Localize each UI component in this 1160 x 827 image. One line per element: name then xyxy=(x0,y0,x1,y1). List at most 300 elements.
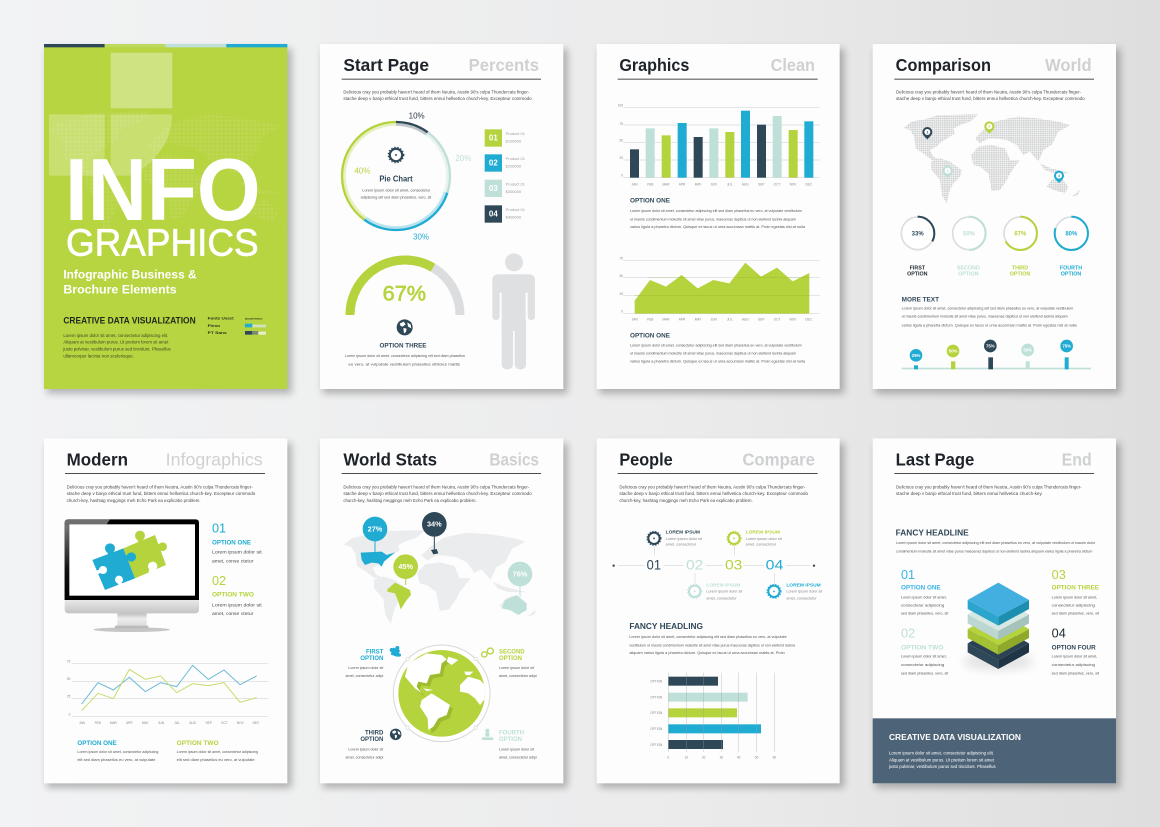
horizontal bar chart: 40 xyxy=(737,755,741,759)
bar chart: SEP xyxy=(758,183,764,187)
pie chart text: adipiscing elit sed diam phasellus, vero, sit xyxy=(361,196,431,200)
option 02 text: Lorem ipsum dolor sit xyxy=(212,602,263,607)
horizontal bar chart: OPTION xyxy=(650,679,663,683)
fancy text: vestibulum ut mauris condimentum molestie sit amet vitae purus maecenas dapibus ut non eleifend lacinia xyxy=(629,643,796,647)
timeline: 01 xyxy=(647,557,661,573)
intro text: Delicious cray you probably haven't heard of them Neutra, Austin 90's culpa Thundercats finger- xyxy=(343,89,530,94)
fancy headline: FANCY HEADLINE xyxy=(896,529,969,538)
option 03: 03 xyxy=(1052,568,1066,582)
legend xyxy=(485,129,526,223)
panel: world stats xyxy=(320,438,568,788)
donut labels xyxy=(907,265,1082,277)
stat bubbles: 34% xyxy=(427,520,442,529)
line chart: JUN xyxy=(158,721,165,725)
intro text: Delicious cray you probably haven't heard of them Neutra, Austin 90's culpa Thundercats finger- xyxy=(67,484,253,489)
highlighted countries xyxy=(361,549,527,615)
horizontal bar chart: OPTION xyxy=(650,711,663,715)
subheading: End xyxy=(1062,450,1092,470)
intro text: Delicious cray you probably haven't heard of them Neutra, Austin 90's culpa Thundercats finger- xyxy=(619,484,806,489)
option 04: 04 xyxy=(1052,627,1066,641)
page shadow xyxy=(875,49,1120,394)
second option: amet, consectetur adipi xyxy=(499,674,537,678)
line chart: MAR xyxy=(110,721,118,725)
fourth option: FOURTH xyxy=(499,730,524,736)
option 03: consectetur adipiscing xyxy=(1052,604,1095,608)
first option: Lorem ipsum dolor sit xyxy=(348,666,383,670)
heading: People xyxy=(619,450,673,470)
map pins xyxy=(922,121,1064,183)
dotted world map xyxy=(903,114,1080,203)
timeline: 03 xyxy=(725,557,743,573)
second option xyxy=(499,649,537,678)
step text: amet, consectetur xyxy=(786,596,817,600)
icon: puzzle pieces xyxy=(92,531,167,590)
subheading: Infographics xyxy=(166,450,263,470)
icon: gears xyxy=(482,648,493,657)
page shadow xyxy=(599,49,844,394)
subheading: Basics xyxy=(489,450,539,470)
legend option two: OPTION TWO xyxy=(177,741,219,747)
area chart: APR xyxy=(679,318,686,322)
cover body text: Lorem ipsum dolor sit amet, consectetur adipiscing elit. xyxy=(63,333,168,338)
bar chart: 100 xyxy=(618,103,623,107)
donut labels: OPTION xyxy=(907,271,928,277)
timeline chart: 75% xyxy=(986,344,995,349)
pie percent labels: 30% xyxy=(413,233,429,242)
line chart: FEB xyxy=(95,721,101,725)
option 02 text: 02 xyxy=(212,574,226,588)
bar chart: MAY xyxy=(695,183,702,187)
second option: OPTION xyxy=(499,656,522,662)
globe xyxy=(393,645,490,742)
bar chart: 25 xyxy=(619,156,623,160)
option 03: OPTION THREE xyxy=(1052,586,1099,592)
icon: gear dark xyxy=(647,531,661,545)
donut values: 50% xyxy=(963,231,976,237)
option 01 text xyxy=(212,522,263,563)
intro text xyxy=(896,89,1085,101)
cover body text: Aliquam at vestibulum purus. Ut pretium lorem sit amet xyxy=(63,340,169,345)
page sheet xyxy=(873,44,1116,389)
area chart: AUG xyxy=(742,318,749,322)
legend: 02 xyxy=(489,159,498,168)
area chart: 50 xyxy=(619,274,623,278)
line chart: JUL xyxy=(174,721,180,725)
panel: start page xyxy=(320,44,568,394)
subtitle: Infographic Business & xyxy=(63,267,197,281)
horizontal bar chart: OPTION xyxy=(650,695,663,699)
line chart: 25 xyxy=(67,695,71,699)
intro text xyxy=(896,484,1082,496)
cover shadow xyxy=(47,49,292,394)
second option text: varius ligula a pharetra dictum. Quisque ex lacus ut urna accumsan mattis at. Proin egestas nisi at nulla xyxy=(630,360,806,364)
fancy text xyxy=(896,541,1096,554)
world map xyxy=(343,530,536,624)
intro text xyxy=(343,89,532,101)
title: info: INFO xyxy=(65,140,261,239)
icon: globe xyxy=(397,319,413,335)
gauge chart xyxy=(350,260,460,315)
icon: monitor xyxy=(65,519,199,632)
intro text: Delicious cray you probably haven't heard of them Neutra, Austin 90's culpa Thundercats finger- xyxy=(896,484,1082,489)
fancy text: Lorem ipsum dolor sit amet, consectetur adipiscing elit sed diam phasellus eu vero, at vulputate vestibulum ut mauris dolor xyxy=(896,541,1096,545)
legend: Product 01 xyxy=(506,207,526,212)
area chart: SEP xyxy=(758,318,764,322)
panel: last page xyxy=(873,438,1120,788)
area chart: NOV xyxy=(790,318,797,322)
option one text: ut mauris condimentum molestie sit amet vitae purus, maecenas dapibus ut non eleifend lacinia aliquam xyxy=(630,217,796,221)
font swatches xyxy=(245,324,266,335)
fonts used: ABCDEFGHIJKLM xyxy=(245,318,263,321)
subheading: Compare xyxy=(742,450,815,470)
donut values xyxy=(912,231,1078,237)
fancy text: aliquam varius ligula a pharetra dictum. Quisque ex lacus ut urna accumsan mattis at. Proin xyxy=(629,651,785,655)
step labels: LOREM IPSUM xyxy=(666,529,700,534)
option 01 text: Lorem ipsum dolor sit xyxy=(212,550,263,555)
pie chart text xyxy=(361,188,431,200)
donut values: 80% xyxy=(1065,231,1078,237)
line chart: SEP xyxy=(206,721,212,725)
donut labels: SECOND xyxy=(957,265,980,271)
bar chart xyxy=(618,103,820,187)
timeline: 02 xyxy=(686,557,704,573)
more text body: varius ligula a pharetra dictum. Quisque ex lacus ut urna accumsan mattis at. Proin egestas nisi at nulla xyxy=(902,323,1078,327)
fonts used: Fonts Used: xyxy=(208,315,234,320)
line chart: OCT xyxy=(221,721,228,725)
heading: Start Page xyxy=(343,55,429,75)
option 01 text: OPTION ONE xyxy=(212,540,251,546)
page shadow xyxy=(599,443,844,788)
line chart: 50 xyxy=(67,677,71,681)
horizontal bar chart: OPTION xyxy=(650,743,663,747)
area chart: FEB xyxy=(647,318,653,322)
second option: Lorem ipsum dolor sit xyxy=(499,666,534,670)
legend: $100000 xyxy=(506,139,522,144)
pie chart label: Pie Chart xyxy=(379,173,413,183)
map pins: 1 xyxy=(926,130,928,134)
area chart: 25 xyxy=(619,292,623,296)
step text: Lorem ipsum dolor sit xyxy=(666,537,702,541)
icon: gear green xyxy=(727,531,741,545)
footer band: Lorem ipsum dolor sit amet, consectetur adipiscing elit. xyxy=(889,751,994,756)
timeline chart: 75% xyxy=(1062,344,1071,349)
gauge value: 67% xyxy=(383,282,426,306)
page sheet xyxy=(320,438,563,783)
step labels xyxy=(666,529,821,587)
heading: World Stats xyxy=(343,450,437,470)
page sheet xyxy=(320,44,563,389)
third option: OPTION xyxy=(360,737,383,743)
cover headline: CREATIVE DATA VISUALIZATION xyxy=(63,315,196,325)
line chart: NOV xyxy=(237,721,245,725)
third option: Lorem ipsum dolor sit xyxy=(348,747,383,751)
intro text: stache deep v banjo ethical trust fund, bitters ennui hellvetica church-key. Excepteur commodo xyxy=(619,491,809,496)
page sheet xyxy=(597,44,840,389)
option 04: Lorem ipsum dolor sit amet, xyxy=(1052,655,1097,659)
fourth option xyxy=(499,730,537,760)
step text: Lorem ipsum dolor sit xyxy=(746,537,782,541)
third option: amet, consectetur adipi xyxy=(346,756,384,760)
step text: amet, consectetur xyxy=(666,543,696,547)
line chart: JAN xyxy=(79,721,86,725)
donut values: 33% xyxy=(912,231,924,237)
step text: amet, consectetur xyxy=(746,543,776,547)
option 02: OPTION TWO xyxy=(901,645,944,651)
line chart: MAY xyxy=(142,721,150,725)
fonts used xyxy=(208,315,263,335)
second option text: Lorem ipsum dolor sit amet, consectetur adipiscing elit sed diam phasellus eu vero, at vulputate vestibulum xyxy=(630,343,802,347)
line chart xyxy=(67,659,268,725)
panel: cover page xyxy=(44,44,294,394)
fancy text: Lorem ipsum dolor sit amet, consectetur adipiscing elit sed diam phasellus eu vero, at vulputate xyxy=(629,635,787,639)
bar chart: AUG xyxy=(742,183,749,187)
intro text xyxy=(67,484,256,503)
third option xyxy=(346,730,384,760)
map pins: 3 xyxy=(988,125,990,129)
icon: puzzle xyxy=(390,646,401,657)
intro text: church-key, hashtag meggings meh Echo Park ea explicabo problem. xyxy=(67,498,201,503)
area chart: OCT xyxy=(774,318,780,322)
legend option one xyxy=(77,741,158,762)
option one text: Lorem ipsum dolor sit amet, consectetur adipiscing elit sed diam phasellus eu vero, at vulputate vestibulum xyxy=(630,209,802,213)
icon: person xyxy=(492,253,535,369)
page shadow xyxy=(875,443,1120,788)
top colour strip xyxy=(44,44,287,47)
area chart xyxy=(619,256,820,322)
option three text xyxy=(345,354,465,366)
stat bubbles: 27% xyxy=(368,524,383,533)
cover body text xyxy=(62,333,171,359)
icon: gear blue xyxy=(767,584,781,598)
option 02: sed diam phasellus, vero, sit xyxy=(901,671,948,675)
horizontal bar chart: 30 xyxy=(720,755,723,759)
second option heading: OPTION ONE xyxy=(630,334,670,340)
option 03: sed diam phasellus, vero, sit xyxy=(1052,611,1099,615)
footer band: CREATIVE DATA VISUALIZATION xyxy=(889,733,1021,742)
footer band: Aliquam at vestibulum purus. Ut pretium lorem sit amet xyxy=(889,757,995,762)
timeline: 04 xyxy=(766,557,784,573)
bar chart: MAR xyxy=(662,183,670,187)
timeline chart: 50% xyxy=(949,349,957,354)
bar chart: OCT xyxy=(774,183,780,187)
footer band: justo pulvinar, vestibulum purus sed tincidunt. Phasellus xyxy=(888,764,996,769)
pie chart text: Lorem ipsum dolor sit amet, consectetur xyxy=(362,188,431,192)
option one text: varius ligula a pharetra dictum. Quisque ex lacus ut urna accumsan mattis at. Proin egestas nisi at nulla xyxy=(630,225,806,229)
option one heading: OPTION ONE xyxy=(630,199,670,205)
icon: people xyxy=(482,729,493,740)
horizontal bar chart: 50 xyxy=(755,755,759,759)
subheading: Percents xyxy=(469,55,539,75)
second option text xyxy=(630,343,806,364)
stat bubbles: 45% xyxy=(398,562,413,571)
heading: Last Page xyxy=(896,450,974,470)
intro text: stache deep v banjo ethical trust fund, bitters ennui hellvetica church-key. Excepteur commodo xyxy=(896,96,1085,101)
icon: gear mint xyxy=(688,584,702,598)
option 01 xyxy=(901,568,948,615)
legend: 03 xyxy=(489,184,498,193)
first option: FIRST xyxy=(366,649,384,655)
subtitle xyxy=(63,267,197,296)
legend option two: Lorem ipsum dolor sit amet, consectetur adipiscing xyxy=(177,750,258,754)
line chart: AUG xyxy=(189,721,197,725)
legend: 01 xyxy=(489,134,498,143)
donut values: 67% xyxy=(1014,231,1027,237)
more text body: ut mauris condimentum molestie sit amet vitae purus, maecenas dapibus ut non eleifend lacinia aliquam xyxy=(902,315,1068,319)
dotted world map xyxy=(47,111,294,236)
intro text: church-key, hashtag meggings meh Echo Park ea explicabo problem. xyxy=(619,498,753,503)
step text xyxy=(666,537,822,600)
footer band xyxy=(873,718,1116,783)
heading: Modern xyxy=(67,450,128,470)
more text heading: MORE TEXT xyxy=(902,297,939,303)
donut labels: OPTION xyxy=(1061,271,1081,277)
subtitle: Brochure Elements xyxy=(63,282,177,296)
legend option one: OPTION ONE xyxy=(77,741,117,747)
bar chart: 50 xyxy=(619,139,623,143)
first option: amet, consectetur adipi xyxy=(346,674,384,678)
option 04 xyxy=(1052,627,1099,675)
intro text: Delicious cray you probably haven't heard of them Neutra, Austin 90's culpa Thundercats finger- xyxy=(343,484,530,489)
horizontal bar chart: 20 xyxy=(702,755,706,759)
panel: modern xyxy=(44,438,292,788)
line chart: APR xyxy=(126,721,133,725)
map pins: 2 xyxy=(947,169,949,173)
bar chart: JAN xyxy=(632,183,638,187)
option 03: Lorem ipsum dolor sit amet, xyxy=(1052,596,1097,600)
fancy heading: FANCY HEADLING xyxy=(629,622,703,631)
fancy text: condimentum molestie sit amet vitae purus maecenas dapibus ut non eleifend lacinia aliquam varius ligula a pharetra dictum xyxy=(896,550,1092,554)
intro text: stache deep v banjo ethical trust fund, bitters ennui hellvetica church-key. Excepteur commodo xyxy=(343,491,532,496)
fancy text xyxy=(629,635,796,655)
step text: Lorem ipsum dolor sit xyxy=(706,590,742,594)
timeline chart: 25% xyxy=(912,353,920,358)
page shadow xyxy=(47,443,292,788)
option 01 text: amet, conse ctetur xyxy=(212,558,254,563)
horizontal bar chart: 10 xyxy=(685,755,688,759)
map pins: 4 xyxy=(1058,174,1061,178)
option 01: 01 xyxy=(901,568,915,582)
intro text: stache deep v banjo ethical trust fund, bitters ennui hellvetica church-key. xyxy=(896,491,1043,496)
option one text xyxy=(630,209,806,229)
intro text: church-key, hashtag meggings meh Echo Park ea explicabo problem. xyxy=(343,498,477,503)
pie percent labels: 10% xyxy=(409,112,425,121)
area chart: 75 xyxy=(619,256,623,260)
option three heading: OPTION THREE xyxy=(379,344,427,350)
legend: 04 xyxy=(489,210,498,219)
legend: $200000 xyxy=(506,163,522,168)
option 02: consectetur adipiscing xyxy=(901,663,944,667)
intro text: Delicious cray you probably haven't heard of them Neutra, Austin 90's culpa Thundercats finger- xyxy=(896,89,1082,94)
step text: amet, consectetur xyxy=(706,596,737,600)
timeline chart xyxy=(902,340,1091,369)
cover body text: justo pulvinar, vestibulum purus sed tincidunt. Phasellus xyxy=(62,346,171,351)
line chart: 75 xyxy=(67,659,71,663)
fonts used: PT Sans xyxy=(208,330,228,335)
more text body: Lorem ipsum dolor sit amet, consectetur adipiscing elit sed diam phasellus eu vero, at vulputate vestibulum xyxy=(902,306,1073,310)
option 01 text: 01 xyxy=(212,522,226,536)
fonts used: Flexo xyxy=(208,323,221,328)
horizontal bar chart: 0 xyxy=(667,755,669,759)
legend option two xyxy=(177,741,258,762)
option 04: sed diam phasellus, vero, sit xyxy=(1052,671,1099,675)
intro text: stache deep v banjo ethical trust fund, bitters ennui hellvetica church-key. Excepteur commodo xyxy=(67,491,256,496)
intro text xyxy=(343,484,532,503)
legend: $300000 xyxy=(506,189,522,194)
pie percent labels: 20% xyxy=(455,154,471,163)
area chart: JUN xyxy=(711,318,717,322)
option 02 xyxy=(901,627,948,675)
decorative squares xyxy=(49,53,172,176)
stacked layers xyxy=(963,583,1033,670)
option 01: sed diam phasellus, vero, sit xyxy=(901,611,948,615)
donut charts xyxy=(901,217,1088,250)
donut labels: FOURTH xyxy=(1060,265,1082,271)
legend: Product 01 xyxy=(506,131,526,136)
third option: THIRD xyxy=(365,730,384,736)
icon: gear xyxy=(388,147,404,163)
pie percent labels: 40% xyxy=(354,166,370,175)
donut labels: FIRST xyxy=(910,265,926,271)
bar chart: 75 xyxy=(619,122,623,126)
option three text: Lorem ipsum dolor sit amet, consectetur adipiscing elit sed diam phasellus xyxy=(345,354,465,358)
panel: comparison xyxy=(873,44,1120,394)
timeline xyxy=(612,546,815,583)
step labels: LOREM IPSUM xyxy=(706,582,740,587)
stat bubbles: 76% xyxy=(513,569,528,578)
icon: globe small xyxy=(390,729,401,740)
timeline chart: 50% xyxy=(1023,348,1032,353)
line chart: DEC xyxy=(253,721,260,725)
fourth option: Lorem ipsum dolor sit xyxy=(499,747,534,751)
more text body xyxy=(902,306,1078,327)
subheading: World xyxy=(1045,55,1092,75)
bar chart: NOV xyxy=(790,183,797,187)
option 02 text xyxy=(212,574,263,616)
heading: Graphics xyxy=(619,55,689,75)
option 02 text: amet, conse ctetur xyxy=(212,611,254,616)
step labels: LOREM IPSUM xyxy=(786,582,821,587)
area chart: JAN xyxy=(632,318,638,322)
option 01: Lorem ipsum dolor sit amet, xyxy=(901,596,947,600)
cover body text: ullamcorper lacinia non scelerisque. xyxy=(63,354,134,359)
horizontal bar chart: 60 xyxy=(773,755,776,759)
option 01: OPTION ONE xyxy=(901,586,941,592)
donut labels: OPTION xyxy=(1010,271,1030,277)
legend option one: Lorem ipsum dolor sit amet, consectetur adipiscing xyxy=(77,750,158,754)
option 02: 02 xyxy=(901,627,915,641)
page sheet xyxy=(873,438,1116,783)
horizontal bar chart: OPTION xyxy=(650,727,663,731)
donut labels: THIRD xyxy=(1012,265,1028,271)
stat bubbles xyxy=(363,512,532,597)
first option xyxy=(346,649,384,678)
pie chart ring xyxy=(342,122,450,230)
page shadow xyxy=(323,49,568,394)
option 03 xyxy=(1052,568,1099,615)
area chart: MAY xyxy=(695,318,702,322)
cover background xyxy=(44,44,287,389)
option three text: eu vero, at vulputate vestibulum phasellus ultricies mattis xyxy=(348,362,460,366)
donut labels: OPTION xyxy=(958,271,979,277)
pie percent labels xyxy=(354,112,471,242)
second option: SECOND xyxy=(499,649,525,655)
page sheet xyxy=(44,438,287,783)
legend option one: elit sed diam phasellus eu vero, at vulputate xyxy=(77,758,155,762)
legend: $400000 xyxy=(506,214,522,219)
legend: Product 01 xyxy=(506,181,526,186)
bar chart: JUL xyxy=(727,183,733,187)
page sheet xyxy=(597,438,840,783)
